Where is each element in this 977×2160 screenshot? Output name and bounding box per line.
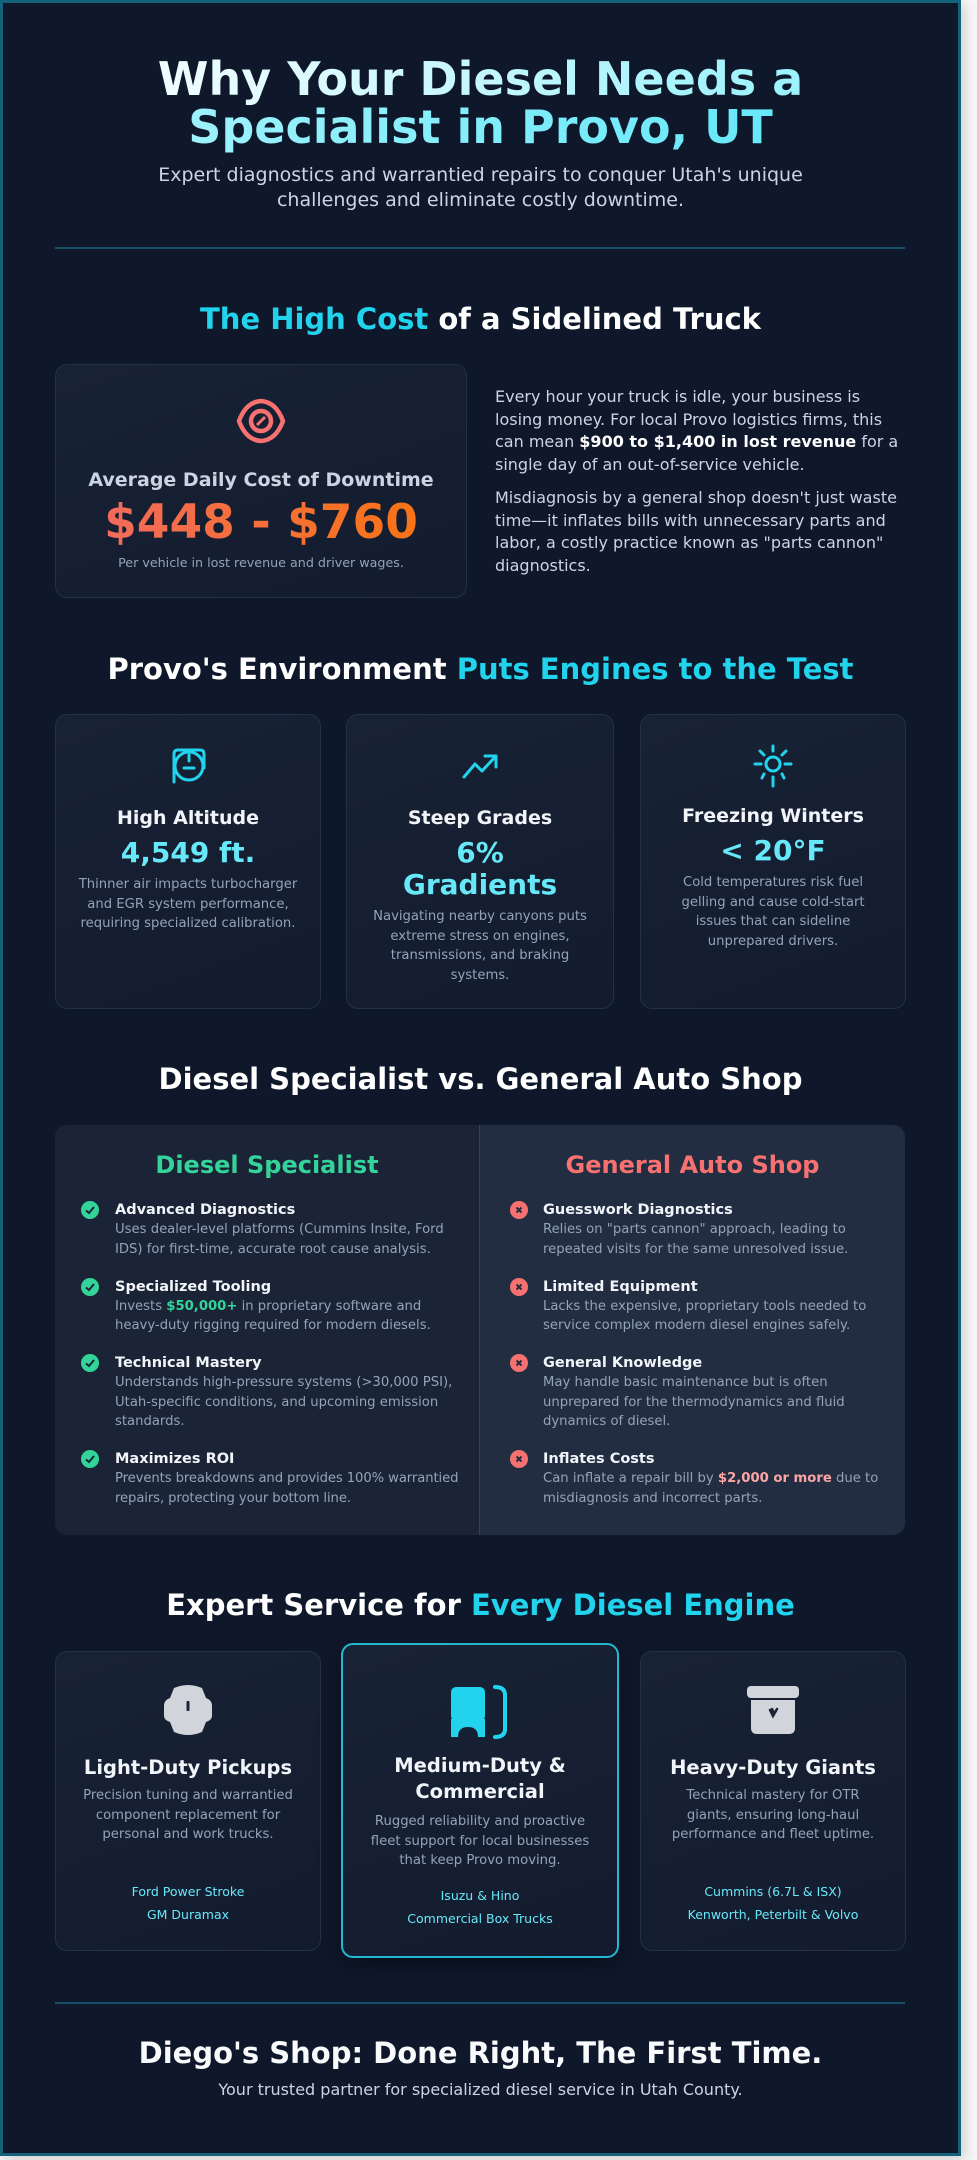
tags: GM Duramax	[147, 1907, 229, 1922]
icon: light duty	[164, 1685, 212, 1735]
icon: sun/cold	[754, 744, 792, 788]
title: Commercial	[415, 1780, 545, 1803]
icon: heavy duty	[747, 1686, 799, 1734]
text block: cost explanation: Misdiagnosis by a general shop doesn't just waste time—it inflates bills with unnecessary parts and labor, a costly practice known as "parts cannon" diagnostics.	[495, 488, 897, 574]
value: 6%	[456, 836, 504, 869]
tags: Ford Power Stroke	[132, 1884, 244, 1899]
subtitle: Expert diagnostics and warrantied repairs to conquer Utah's unique challenges and eliminate costly downtime.	[158, 164, 803, 211]
item: guesswork: Guesswork Diagnostics	[543, 1202, 733, 1218]
caption: Per vehicle in lost revenue and driver wages.	[118, 555, 404, 570]
title: Heavy-Duty Giants	[670, 1756, 876, 1779]
item: inflates costs: Inflates Costs	[543, 1451, 654, 1467]
heading: expert service: Expert Service for Every Diesel Engine	[166, 1588, 795, 1622]
description: Technical mastery for OTR giants, ensuring long-haul performance and fleet uptime.	[672, 1788, 874, 1842]
title: High Altitude	[117, 807, 259, 829]
panel: medium-duty (highlighted)	[341, 1643, 619, 1958]
item: limited equipment: Limited Equipment	[543, 1278, 698, 1294]
item: limited equipment	[510, 1278, 866, 1333]
item: advanced diagnostics: Advanced Diagnostics	[115, 1202, 295, 1218]
icon: eye	[236, 398, 286, 444]
heading: environment: Provo's Environment Puts Engines to the Test	[107, 652, 854, 686]
title	[394, 1754, 566, 1803]
tags	[132, 1884, 244, 1922]
item: inflates costs	[510, 1450, 878, 1506]
item: limited equipment: Lacks the expensive, proprietary tools needed to service complex modern diesel engines safely.	[543, 1298, 866, 1333]
item: general knowledge: General Knowledge	[543, 1355, 702, 1371]
description: Cold temperatures risk fuel gelling and cause cold-start issues that can sideline unprepared drivers.	[681, 875, 865, 948]
item: advanced diagnostics: Uses dealer-level platforms (Cummins Insite, Ford IDS) for first-time, accurate root cause analysis.	[115, 1222, 444, 1256]
column heading: Diesel Specialist	[155, 1151, 379, 1179]
panel: freezing winters	[640, 714, 906, 1009]
item: guesswork	[510, 1201, 848, 1256]
panel: high altitude	[55, 714, 321, 1009]
footer subtitle: Your trusted partner for specialized diesel service in Utah County.	[218, 2080, 743, 2099]
column heading: General Auto Shop	[566, 1151, 819, 1179]
panel: light-duty	[55, 1651, 321, 1951]
big number: $448 - $760	[104, 495, 418, 550]
icon: trend arrow	[462, 754, 498, 779]
title: Freezing Winters	[682, 805, 864, 827]
icon: medium duty	[451, 1685, 507, 1739]
item: maximizes roi: Prevents breakdowns and provides 100% warrantied repairs, protecting your bottom line.	[115, 1471, 458, 1506]
item: specialized tooling	[81, 1278, 431, 1333]
footer title: Diego's Shop: Done Right, The First Time.	[139, 2036, 822, 2070]
tags: Commercial Box Trucks	[407, 1911, 553, 1926]
title: Medium-Duty &	[394, 1754, 566, 1777]
text block: cost explanation: Every hour your truck is idle, your business is losing money. For local Provo logistics firms, this can mean $900 to $1,400 in lost revenue for a single day of an out-of-service vehicle.	[495, 387, 898, 474]
text block: cost explanation	[495, 387, 898, 574]
item: maximizes roi: Maximizes ROI	[115, 1451, 234, 1467]
panel: heavy-duty	[640, 1651, 906, 1951]
value: 4,549 ft.	[121, 836, 255, 869]
panel: downtime cost card	[55, 364, 467, 598]
tags	[688, 1884, 858, 1922]
item: general knowledge	[510, 1354, 845, 1429]
title: Specialist in Provo, UT	[188, 100, 773, 154]
description: Thinner air impacts turbocharger and EGR system performance, requiring specialized calibration.	[79, 877, 297, 931]
description: Precision tuning and warrantied component replacement for personal and work trucks.	[83, 1788, 293, 1842]
tags: Cummins (6.7L & ISX)	[704, 1884, 842, 1899]
item: general knowledge: May handle basic maintenance but is often unprepared for the thermodynamics and fluid dynamics of diesel.	[543, 1375, 845, 1429]
description: Navigating nearby canyons puts extreme stress on engines, transmissions, and braking systems.	[373, 909, 587, 982]
title: Light-Duty Pickups	[84, 1756, 292, 1779]
item: technical mastery: Understands high-pressure systems (>30,000 PSI), Utah-specific conditions, and upcoming emission standards.	[115, 1375, 452, 1429]
label: Average Daily Cost of Downtime	[88, 469, 434, 491]
panel: comparison table	[55, 1125, 905, 1535]
item: inflates costs: Can inflate a repair bill by $2,000 or more due to misdiagnosis and incorrect parts.	[543, 1471, 878, 1506]
item: specialized tooling: Specialized Tooling	[115, 1278, 271, 1294]
column: general auto shop	[480, 1125, 905, 1535]
value: < 20°F	[720, 834, 826, 867]
tags: Kenworth, Peterbilt & Volvo	[688, 1907, 858, 1922]
value	[403, 836, 557, 901]
tags	[407, 1888, 553, 1926]
item: advanced diagnostics	[81, 1201, 444, 1256]
item: guesswork: Relies on "parts cannon" approach, leading to repeated visits for the same unresolved issue.	[543, 1222, 848, 1256]
tags: Isuzu & Hino	[441, 1888, 519, 1903]
heading: comparison: Diesel Specialist vs. General Auto Shop	[159, 1062, 802, 1096]
item: technical mastery: Technical Mastery	[115, 1355, 262, 1371]
item: specialized tooling: Invests $50,000+ in proprietary software and heavy-duty rigging required for modern diesels.	[115, 1298, 431, 1333]
heading: high cost: The High Cost of a Sidelined Truck	[200, 302, 761, 336]
title: Steep Grades	[408, 807, 552, 829]
column: diesel specialist	[55, 1125, 480, 1535]
item: technical mastery	[81, 1354, 452, 1429]
item: maximizes roi	[81, 1450, 458, 1506]
description: Rugged reliability and proactive fleet support for local businesses that keep Provo moving.	[371, 1814, 589, 1868]
title	[158, 52, 803, 154]
icon: altitude	[172, 748, 206, 784]
title: Why Your Diesel Needs a	[158, 52, 803, 106]
panel: steep grades	[346, 714, 614, 1009]
value: Gradients	[403, 868, 557, 901]
